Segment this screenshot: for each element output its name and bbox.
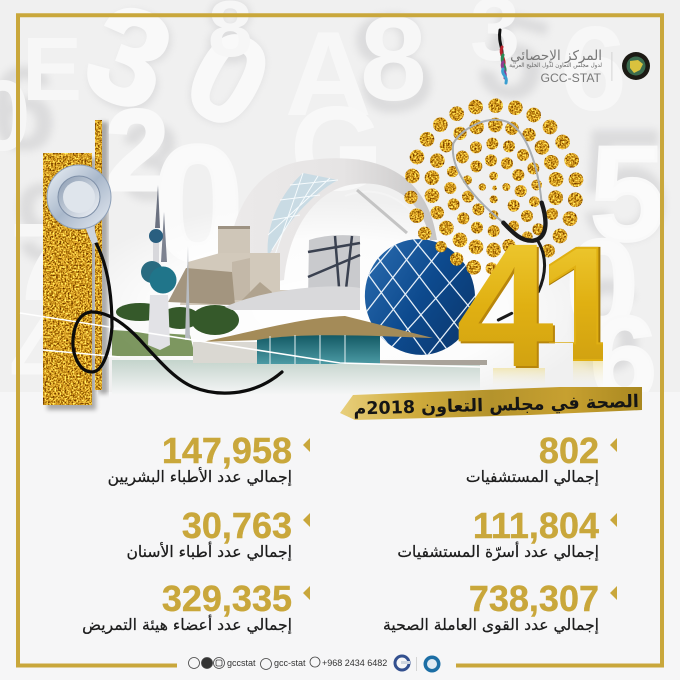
stat: hospitals: إجمالي المستشفيات	[466, 468, 599, 486]
icon: G logo	[395, 656, 410, 670]
number 41: 4	[456, 208, 554, 404]
footer	[188, 656, 440, 672]
stat: dentists: إجمالي عدد أطباء الأسنان	[126, 543, 292, 561]
stat: nursing staff	[82, 578, 310, 634]
background: numerals pattern: 7	[10, 201, 71, 324]
arch	[228, 158, 437, 290]
stat: health workforce	[383, 578, 617, 634]
white lines	[20, 313, 480, 367]
buildings collage	[20, 158, 487, 395]
number 41: 4	[458, 210, 556, 406]
water	[112, 360, 480, 395]
background: numerals pattern: 6	[570, 252, 642, 398]
background: numerals pattern: 4	[10, 291, 71, 414]
background: numerals pattern: 5	[590, 118, 665, 269]
social icons	[188, 657, 320, 670]
background: numerals pattern: 2	[105, 87, 169, 215]
fort	[168, 226, 300, 305]
phone: +968 2434 6482	[322, 658, 387, 668]
background: numerals pattern: E	[22, 20, 82, 120]
stat: dentists: 30,763	[182, 505, 292, 546]
grey mesh building	[308, 235, 360, 300]
title ribbon	[340, 387, 642, 420]
number 41: 1	[537, 212, 628, 395]
glass dome	[268, 173, 338, 257]
number 41	[458, 244, 603, 368]
icon: TUV	[424, 656, 440, 672]
stat: hospitals	[466, 430, 617, 486]
stat: nursing staff: 329,335	[162, 578, 292, 619]
stat: hospital beds: إجمالي عدد أسرّة المستشفيات	[397, 543, 599, 561]
stethoscope left	[47, 165, 282, 393]
logo: GCC-STAT	[500, 30, 612, 85]
number 41: 1	[539, 212, 630, 395]
stat: physicians	[108, 430, 310, 486]
stat: nursing staff: إجمالي عدد أعضاء هيئة التمريض	[82, 616, 292, 634]
gold dots	[404, 98, 583, 275]
logo ribbons	[500, 30, 506, 83]
background: numerals pattern: 6	[560, 2, 627, 136]
logo subtitle: لدول مجلس التعاون لدول الخليج العربية	[509, 63, 602, 69]
background: numerals pattern: G	[290, 82, 383, 216]
background: numerals pattern: 0	[152, 111, 244, 295]
title text: الصحة في مجلس التعاون 2018م	[353, 392, 639, 419]
background: numerals pattern: 0	[165, 2, 291, 157]
stat: hospital beds: 111,804	[473, 505, 599, 546]
stat: dentists	[126, 505, 310, 561]
gold bars	[43, 120, 108, 410]
icon: GCC seal	[622, 52, 650, 80]
logo name arabic: المركز الإحصائي	[510, 48, 602, 64]
background: numerals pattern: 0	[162, 0, 294, 160]
background: numerals pattern: 5	[580, 95, 669, 274]
handle 2: gcc-stat	[274, 658, 306, 668]
background: numerals pattern: A	[285, 7, 372, 141]
low building	[193, 316, 487, 365]
chest piece	[83, 220, 98, 244]
trees	[112, 303, 239, 356]
background: numerals pattern: 3	[120, 101, 181, 224]
stat: hospital beds	[397, 505, 617, 561]
background: numerals pattern: 6	[590, 292, 657, 426]
reflection of 41	[493, 361, 603, 390]
stat: physicians: إجمالي عدد الأطباء البشريين	[108, 468, 292, 486]
background: numerals pattern: 0	[566, 212, 638, 358]
logo name latin: GCC-STAT	[541, 71, 602, 85]
stat: health workforce: 738,307	[469, 578, 599, 619]
stat: physicians: 147,958	[162, 430, 292, 471]
stat: health workforce: إجمالي عدد القوى العاملة الصحية	[383, 616, 599, 634]
background: numerals pattern: 9	[15, 161, 76, 284]
stethoscope right	[453, 120, 545, 320]
UFO dome	[225, 286, 360, 310]
Aldar sphere	[364, 239, 476, 355]
tube	[73, 243, 282, 393]
Kuwait towers	[141, 185, 190, 350]
stat: hospitals: 802	[539, 430, 599, 471]
handle 1: gccstat	[227, 658, 256, 668]
